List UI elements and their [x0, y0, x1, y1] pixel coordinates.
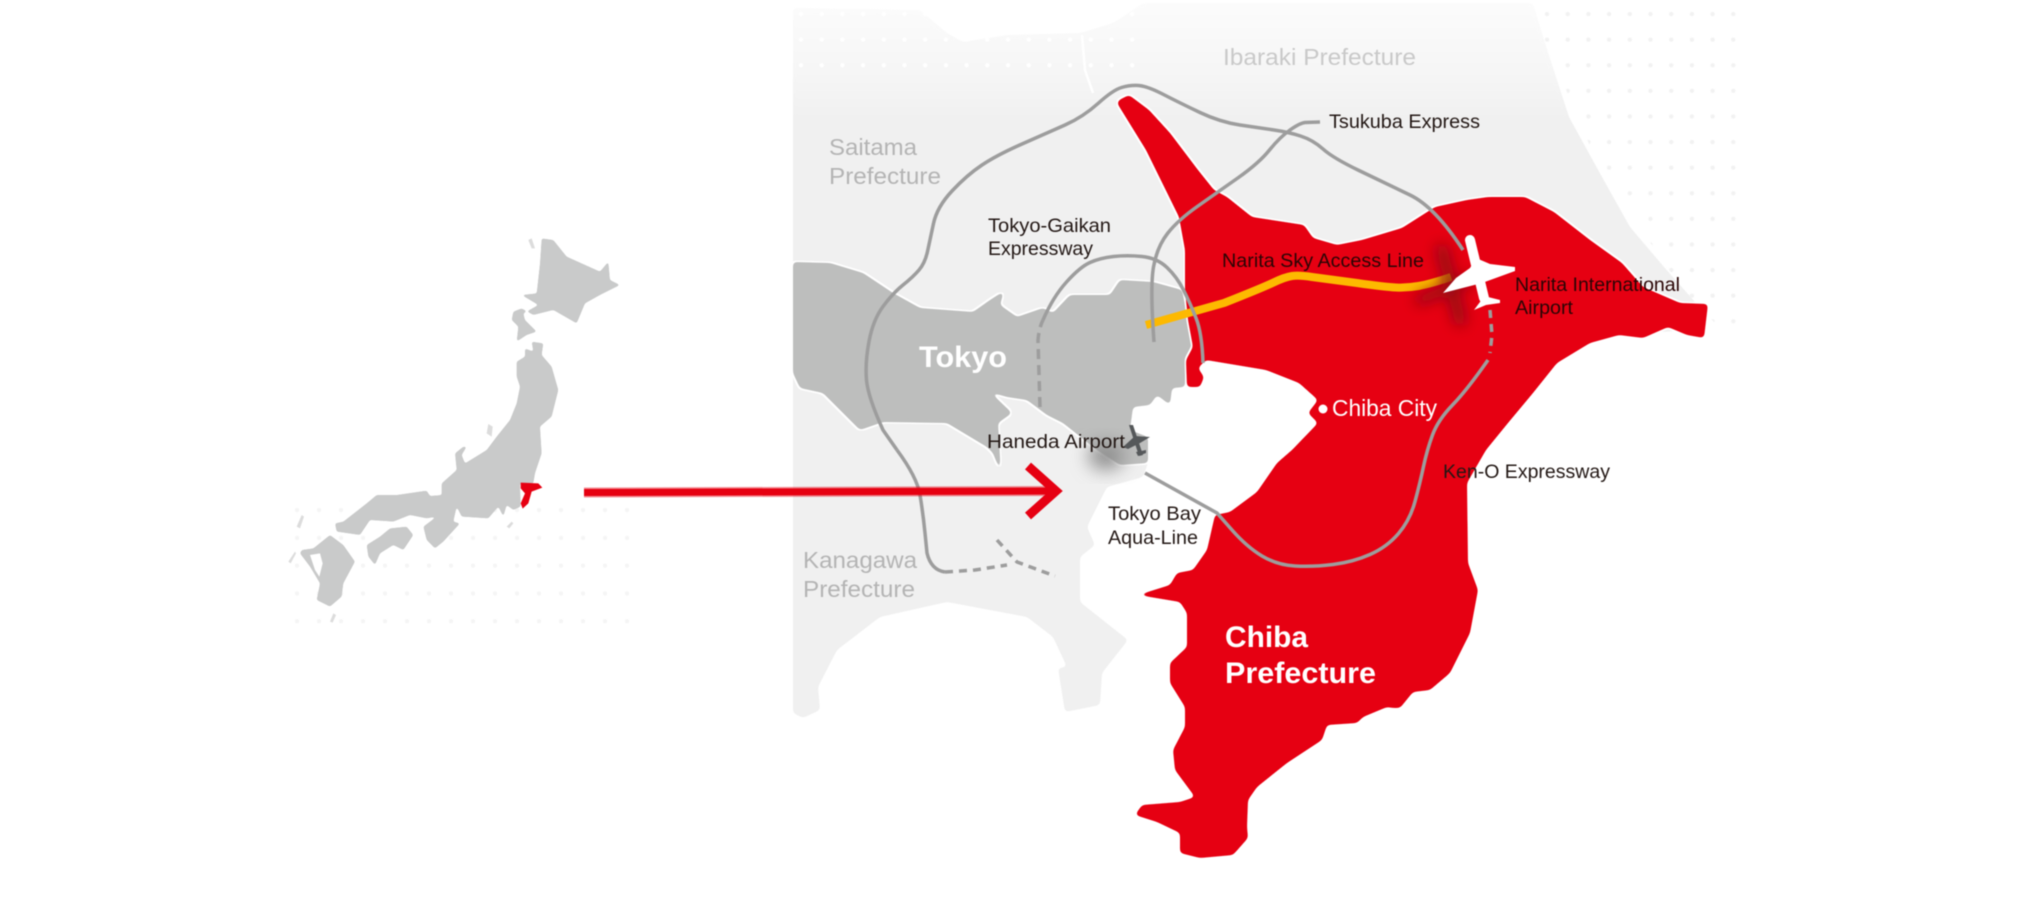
map: Japan overview — [288, 238, 620, 623]
rail line: Narita Sky Access — [1146, 276, 1451, 325]
label: Saitama Prefecture: Saitama — [829, 134, 918, 160]
label: Narita Sky Access Line: Narita Sky Access Line — [1222, 250, 1424, 272]
map: Kanto land — [793, 3, 1696, 718]
marker: Chiba City — [1318, 404, 1328, 414]
label: Tokyo-Gaikan Expressway: Expressway — [988, 238, 1093, 260]
label: Tokyo-Gaikan Expressway: Tokyo-Gaikan — [988, 215, 1111, 237]
airport shadow: Haneda — [1088, 442, 1124, 470]
label: Tsukuba Express: Tsukuba Express — [1329, 111, 1480, 133]
label: Kanagawa Prefecture: Kanagawa — [803, 547, 918, 573]
Kyushu bay — [310, 553, 323, 577]
label: Haneda Airport: Haneda Airport — [987, 431, 1126, 453]
icon: Narita plane — [1443, 240, 1515, 310]
label: Tokyo Bay Aqua-Line: Tokyo Bay — [1108, 503, 1201, 525]
background dot pattern: right ocean — [1130, 0, 1745, 350]
map: Chiba Prefecture — [1117, 95, 1708, 858]
road: Ken-O Expressway and Aqua-Line — [866, 85, 1492, 576]
plane shadow: Narita — [1420, 250, 1470, 320]
road: Tokyo-Gaikan Expressway — [1038, 256, 1203, 407]
land dot pattern — [793, 8, 1143, 68]
icon: Haneda plane — [1123, 425, 1150, 456]
label: Tokyo: Tokyo — [919, 341, 1007, 374]
label: Chiba Prefecture: Chiba — [1225, 621, 1309, 654]
label: Chiba Prefecture: Prefecture — [1225, 657, 1376, 690]
map: Tokyo — [793, 262, 1193, 474]
label: Narita International Airport: Airport — [1515, 297, 1574, 319]
label: Tokyo Bay Aqua-Line: Aqua-Line — [1108, 527, 1198, 549]
background dot pattern: Japan — [290, 505, 635, 625]
label: Chiba City: Chiba City — [1332, 395, 1437, 421]
label: Ken-O Expressway: Ken-O Expressway — [1443, 461, 1610, 483]
label: Kanagawa Prefecture: Prefecture — [803, 576, 915, 602]
main islands — [300, 238, 620, 607]
road: Tsukuba Express — [1152, 122, 1320, 342]
small islands — [288, 238, 535, 623]
label: Narita International Airport: Narita International — [1515, 274, 1680, 296]
Chiba highlight — [521, 483, 542, 509]
boundary: Saitama and Ibaraki — [1082, 35, 1093, 93]
label: Ibaraki Prefecture: Ibaraki Prefecture — [1223, 44, 1416, 70]
arrow: Japan to Kanto — [584, 466, 1056, 516]
label: Saitama Prefecture: Prefecture — [829, 163, 941, 189]
